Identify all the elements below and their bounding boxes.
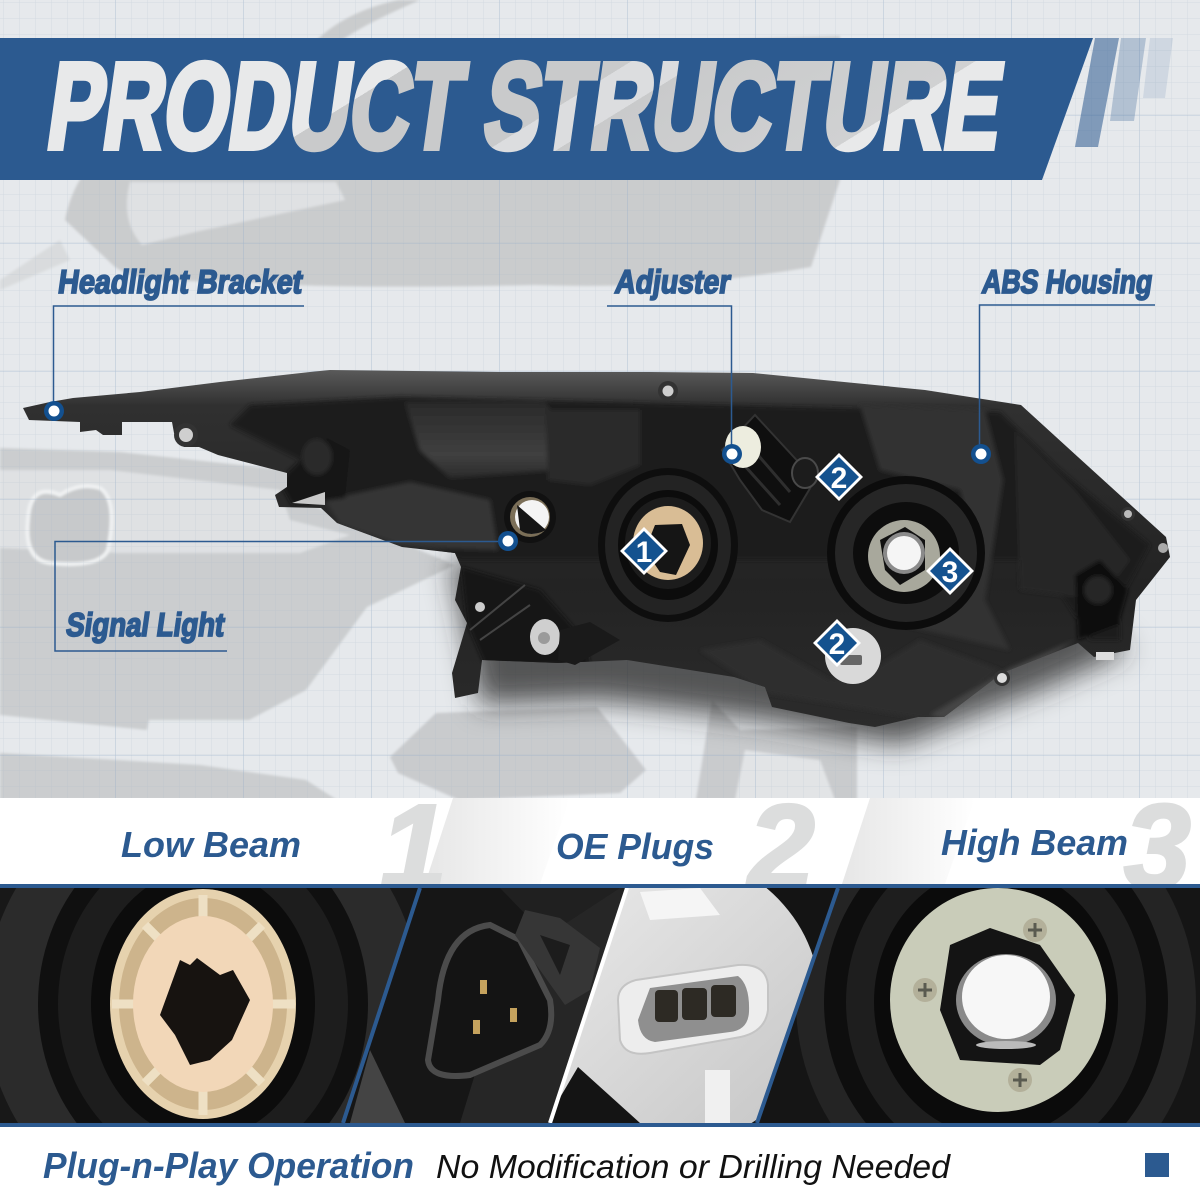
marker 3: 3 — [942, 556, 958, 589]
callout: headlight bracket: Headlight Bracket — [56, 264, 305, 301]
label: high beam: High Beam — [941, 822, 1128, 863]
label: low beam: Low Beam — [121, 824, 301, 865]
photo screws — [913, 918, 1047, 1092]
footer — [0, 1127, 1200, 1200]
photo: grey plug disc — [552, 888, 836, 1123]
adjuster and connector — [722, 415, 818, 522]
interior moulding — [230, 397, 1150, 720]
headlight assembly — [23, 370, 1170, 727]
callout: signal light — [55, 531, 518, 651]
marker 2 lower: 2 — [829, 628, 845, 661]
high beam socket — [827, 476, 985, 630]
label: OE plugs: OE Plugs — [556, 826, 714, 867]
background: blueprint grid with ghosted car — [0, 0, 1200, 800]
housing silhouette — [23, 370, 1170, 727]
callout: signal light: Signal Light — [64, 607, 227, 644]
big numerals: 3 — [1124, 780, 1191, 914]
label strip — [0, 798, 1200, 884]
footer headline: Plug-n-Play Operation — [43, 1145, 414, 1186]
callout: adjuster — [607, 264, 742, 464]
callout: adjuster: Adjuster — [613, 264, 733, 301]
big numerals: 1 — [380, 780, 447, 914]
marker 2 upper: 2 — [831, 462, 847, 495]
headlight shadow — [450, 560, 1130, 745]
low beam socket — [598, 468, 738, 622]
title banner — [0, 38, 1093, 180]
marker 3 — [926, 547, 974, 595]
footer subline: No Modification or Drilling Needed — [436, 1148, 952, 1185]
callout: ABS housing: ABS Housing — [980, 264, 1155, 301]
big numerals — [381, 802, 1191, 884]
banner accent stripes — [1075, 38, 1173, 147]
callout: ABS housing — [971, 264, 1155, 464]
marker 2 lower — [813, 619, 861, 667]
screws — [174, 381, 1168, 686]
photo: high beam socket — [759, 888, 1200, 1123]
marker 1 — [620, 527, 668, 575]
marker 1: 1 — [636, 536, 652, 569]
footer square — [1145, 1153, 1169, 1177]
photo: low beam socket — [0, 888, 418, 1123]
photo dividers — [0, 884, 1200, 1127]
big numerals: 2 — [746, 780, 815, 914]
signal light socket — [504, 491, 556, 543]
lower adjuster bolt — [470, 585, 620, 665]
photo: bulb connector — [340, 888, 630, 1124]
marker 2 upper — [815, 453, 863, 501]
callout: headlight bracket — [44, 264, 305, 421]
rear plug disc — [825, 628, 881, 684]
